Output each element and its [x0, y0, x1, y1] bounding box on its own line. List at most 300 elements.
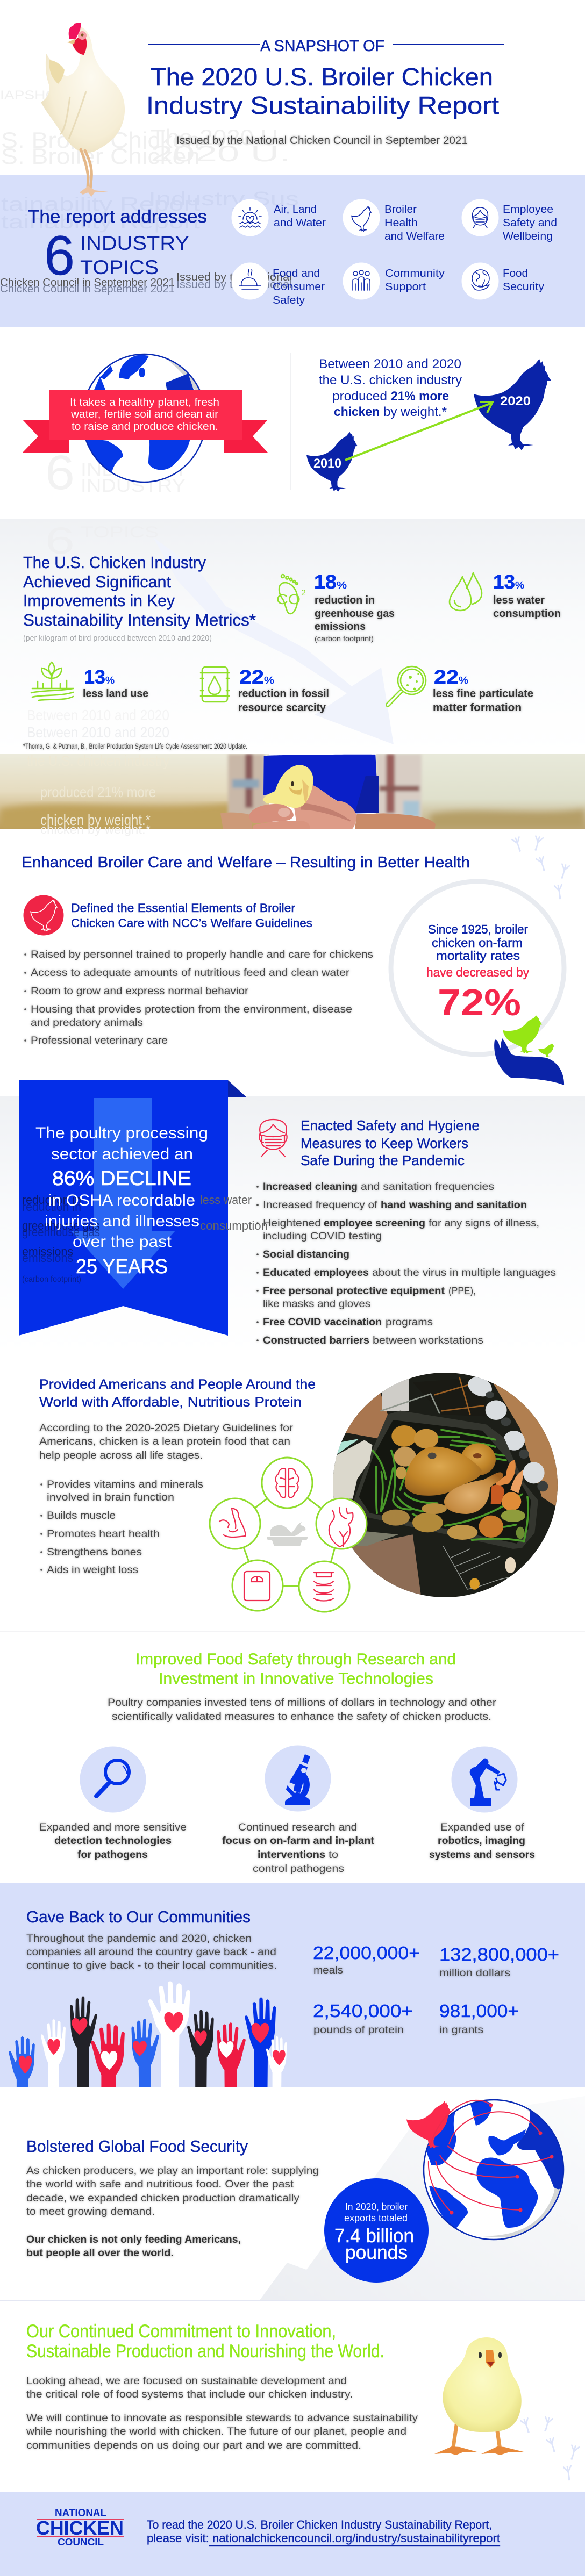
stat: meals: 22,000,000+: [313, 1943, 420, 1963]
community paragraph: Throughout the pandemic and 2020, chicken: [26, 1933, 252, 1944]
ghost text below banner: [45, 446, 188, 500]
ghost text on ribbon: greenhouse gas: [22, 1225, 100, 1239]
mortality callout: Since 1925, broiler: [428, 922, 528, 936]
ghost text below banner: INDUSTRY: [81, 460, 188, 480]
potatoes: [391, 1425, 417, 1447]
mortality callout: 72%: [438, 981, 521, 1023]
ribbon body: [19, 1080, 228, 1336]
commitment paragraph two: while nourishing the world with chicken. The future of our planet, people and: [26, 2426, 406, 2437]
icon: CO2 footprint: [279, 575, 298, 614]
faint ghost title text: The 2020 U.: [151, 125, 285, 150]
protein bullet list: Promotes heart health: [47, 1528, 160, 1540]
topic: food security: [461, 262, 544, 300]
icon: roast on plate: [239, 269, 261, 289]
metric: water: 13: [493, 571, 515, 593]
metrics heading: Achieved Significant: [23, 572, 171, 591]
technology: robotics: systems and sensors: [429, 1849, 535, 1861]
mortality callout: have decreased by: [426, 965, 529, 979]
roast chicken body: [461, 1443, 496, 1475]
welfare bullet list: Access to adequate amounts of nutritious feed and clean water: [31, 967, 350, 979]
broccoli: [501, 1510, 525, 1522]
oven mitt: [332, 1440, 373, 1499]
photo: roast chicken in pan: [332, 1370, 563, 1601]
welfare bullet list: Raised by personnel trained to properly handle and care for chickens: [31, 949, 373, 960]
metric: land use: 13: [84, 666, 105, 688]
topic: broiler health and welfare: and Welfare: [384, 231, 445, 242]
stat: million dollars: million dollars: [439, 1967, 510, 1979]
footnote: *Thoma, G. & Putman, B., Broiler Production System Life Cycle Assessment: 2020 Update.: [23, 742, 247, 750]
subtitle: Issued by the National Chicken Council in September 2021: [176, 134, 468, 147]
safety bullet list: about the virus in multiple languages: [372, 1267, 556, 1279]
topic: broiler health and welfare: Health: [384, 217, 418, 229]
stat: grants: [439, 2001, 519, 2036]
topic: food security: Security: [503, 281, 544, 293]
blue ribbon with decline statistic: [19, 1080, 268, 1336]
food safety paragraph: scientifically validated measures to enhance the safety of chicken products.: [112, 1711, 491, 1723]
welfare bullet list: and predatory animals: [31, 1017, 143, 1029]
technology: detection: detection technologies: [54, 1835, 172, 1847]
community paragraph: continue to give back - to their local communities.: [26, 1960, 277, 1971]
protein bullet list: Builds muscle: [47, 1510, 116, 1522]
safety bullet list: Increased cleaning: [263, 1181, 358, 1193]
photo: yellow chick: [434, 2337, 524, 2455]
ghost text over photo: produced 21% more: [40, 784, 156, 800]
topic: employee safety and wellbeing: Safety and: [503, 217, 557, 229]
banner text: [70, 397, 219, 433]
metrics heading: The U.S. Chicken Industry: [23, 553, 206, 572]
ghost text below banner: 6: [45, 446, 75, 500]
nutrition icon ring: [210, 1458, 367, 1612]
production statement: Between 2010 and 2020: [319, 357, 461, 371]
metric: greenhouse gas: greenhouse gas: [315, 608, 395, 620]
icon: oil barrel: [201, 667, 229, 702]
safety bullet list: Increased frequency of: [263, 1199, 378, 1211]
hen comb: [69, 23, 81, 39]
technology: research: [222, 1746, 375, 1875]
safety bullet list: [256, 1181, 556, 1346]
bird tracks decoration: [512, 836, 569, 899]
footer call to action: To read the 2020 U.S. Broiler Chicken Industry Sustainability Report,: [147, 2518, 492, 2531]
icon: magnifier with particles: [386, 666, 426, 706]
topic: food and consumer safety: Consumer: [273, 281, 325, 293]
logo: National Chicken Council: COUNCIL: [58, 2537, 104, 2548]
photo strip: chick held in hands: [0, 754, 585, 829]
safety heading: [301, 1117, 480, 1168]
metrics note: (per kilogram of bird produced between 2010 and 2020): [23, 634, 212, 643]
hen legs and foot: [81, 149, 91, 189]
safety bullet list: Educated employees: [263, 1267, 369, 1279]
protein heading: [39, 1377, 316, 1410]
ghost text on ribbon: emissions: [22, 1251, 73, 1265]
commitment paragraph two: We will continue to innovate as responsible stewards to advance sustainability: [26, 2412, 418, 2424]
chick feet: [434, 2446, 477, 2455]
topic: community support: Support: [385, 281, 426, 293]
safety bullet list: and sanitation frequencies: [361, 1181, 494, 1193]
mortality callout: chicken on-farm: [432, 936, 523, 950]
safety bullet list: employee screening: [324, 1217, 425, 1229]
commitment paragraph one: the critical role of food systems that include our chicken industry.: [26, 2388, 353, 2400]
metric: fine particulate: 22: [434, 666, 459, 688]
chick face: [479, 2352, 482, 2358]
technology: research: focus on on-farm and in-plant: [222, 1835, 375, 1847]
topics headline: [28, 206, 207, 287]
icon: rooster outline: [352, 206, 371, 231]
food safety heading: Investment in Innovative Technologies: [159, 1670, 433, 1688]
safety bullet list: between workstations: [373, 1334, 483, 1346]
topics headline: TOPICS: [80, 256, 159, 278]
ghost text: council line: Chicken Council in September 2021: [0, 277, 175, 289]
ghost text: council line: [0, 271, 292, 295]
icon: microscope: [285, 1754, 310, 1805]
topic: community support: Community: [385, 268, 445, 279]
mortality callout: mortality rates: [436, 949, 520, 963]
safety bullet list: Constructed barriers: [263, 1334, 369, 1346]
inner down arrow: [71, 1098, 175, 1289]
protein paragraph: [39, 1422, 294, 1461]
ghost text in metrics: TOPICS: [81, 523, 159, 541]
node: muscle arm: [210, 1498, 260, 1549]
ghost text over topics band: Industry Sus: [148, 188, 299, 210]
technology: research: to: [329, 1849, 338, 1861]
topic: employee safety and wellbeing: Employee: [503, 204, 553, 216]
export routes: [429, 2100, 552, 2213]
ghost text on ribbon: [22, 1193, 268, 1284]
metric: fossil resources: resource scarcity: [238, 702, 326, 714]
icon: sun and waves: [239, 207, 261, 227]
metrics heading: Sustainability Intensity Metrics*: [23, 611, 256, 629]
production statement: the U.S. chicken industry: [319, 373, 462, 388]
ghost text: council line: Chicken Council in September 2021: [0, 283, 175, 295]
welfare bullet list: Housing that provides protection from the environment, disease: [31, 1003, 352, 1015]
ghost text over topics band: [1, 188, 299, 233]
food safety paragraph: Poultry companies invested tens of millions of dollars in technology and other: [108, 1697, 497, 1709]
technology: detection: Expanded and more sensitive: [39, 1821, 187, 1833]
technology: research: Continued research and: [238, 1821, 357, 1833]
blue shirt: [263, 755, 379, 813]
technology: robotics: Expanded use of: [440, 1821, 525, 1833]
safety bullet list: like masks and gloves: [263, 1298, 370, 1310]
production statement: [319, 357, 462, 419]
pan: [354, 1411, 538, 1549]
faint section line: [0, 1631, 585, 1632]
metric: greenhouse gas: CO: [276, 591, 301, 607]
community paragraph: companies all around the country gave back - and: [26, 1946, 276, 1958]
welfare subheading: Chicken Care with NCC’s Welfare Guidelines: [71, 916, 312, 930]
commitment paragraph two: [26, 2412, 418, 2451]
safety bullet list: Free COVID vaccination: [263, 1316, 382, 1328]
ribbon text: The poultry processing: [35, 1124, 208, 1142]
ghost text on ribbon: reduction in: [22, 1200, 81, 1214]
metric: fossil resources: reduction in fossil: [238, 688, 329, 700]
growth arrow: [345, 402, 493, 460]
metrics heading: [23, 553, 256, 629]
ghost text over photo: [27, 752, 169, 836]
metric: greenhouse gas: (carbon footprint): [315, 634, 374, 643]
welfare bullet list: Room to grow and express normal behavior: [31, 985, 249, 997]
green beans: [373, 1430, 528, 1542]
main title: Industry Sustainability Report: [146, 91, 499, 119]
food security bold statement: but people all over the world.: [26, 2247, 174, 2259]
photo: white hen: [41, 23, 125, 197]
ribbon text: over the past: [73, 1233, 172, 1251]
oven rack: [443, 1546, 509, 1589]
metric: water: consumption: [493, 608, 561, 620]
commitment heading: Sustainable Production and Nourishing the World.: [26, 2341, 384, 2362]
food security paragraph: [26, 2165, 319, 2218]
banner text: It takes a healthy planet, fresh: [70, 397, 219, 408]
protein paragraph: help people across all life stages.: [39, 1450, 203, 1461]
banner text: to raise and produce chicken.: [72, 421, 218, 433]
metric: fossil resources: %: [264, 675, 274, 686]
metric: land use: %: [105, 675, 115, 686]
background mountain arrow: [259, 2096, 585, 2301]
icon: masked face: [473, 207, 488, 228]
safety bullet list: hand washing and sanitation: [381, 1199, 527, 1211]
logo: National Chicken Council: NATIONAL: [55, 2507, 106, 2519]
band: community: [0, 1883, 585, 2087]
footer call to action: please visit: nationalchickencouncil.org/industry/sustainabilityreport: [147, 2531, 500, 2545]
safety bullet list: programs: [386, 1316, 433, 1328]
safety bullet list: (PPE),: [448, 1285, 476, 1297]
production statement: 21% more: [391, 389, 449, 404]
large faint down arrow: [153, 537, 394, 744]
food safety heading: [135, 1651, 456, 1688]
chart: chicken 2010 to 2020 growth: [306, 359, 551, 492]
section: safety and hygiene background: [0, 1096, 585, 1354]
node: heart organ: [316, 1498, 367, 1549]
metric: greenhouse gas: emissions: [315, 621, 366, 633]
red rooster badge: [24, 895, 63, 935]
ghost text over photo: the U.S. chicken industry: [27, 752, 169, 769]
icon: magnifying glass: [96, 1760, 129, 1796]
icon: face mask: [259, 1120, 287, 1157]
illustration: export globe with routes: [406, 2099, 567, 2241]
chicken silhouette 2020: [474, 359, 551, 450]
protein paragraph: According to the 2020-2025 Dietary Guidelines for: [39, 1422, 294, 1434]
metric: water: %: [515, 580, 524, 591]
safety bullet list: Heightened: [263, 1217, 321, 1229]
ghost text on ribbon: emissions: [22, 1245, 73, 1258]
welfare bullet list: [24, 949, 373, 1046]
welfare subheading: [71, 901, 312, 930]
globe: [87, 355, 199, 482]
globe: [422, 2099, 567, 2241]
bird tracks near chick: [520, 2417, 579, 2480]
chick body: [443, 2337, 522, 2432]
label 2010: 2010: [313, 456, 341, 471]
ghost text over topics band: tainability Report: [1, 193, 200, 215]
ghost text on ribbon: consumption: [200, 1219, 268, 1232]
chick: [262, 765, 313, 808]
safety heading: Safe During the Pandemic: [301, 1152, 465, 1168]
stat: meals: meals: [313, 1964, 343, 1976]
technology: detection: for pathogens: [77, 1849, 148, 1861]
food security bold statement: [26, 2234, 241, 2259]
ghost text in metrics: Between 2010 and 2020: [27, 724, 169, 741]
technology: robotics: robotics, imaging: [438, 1835, 525, 1847]
icon: hen and chick in hand: [494, 1015, 564, 1085]
protein heading: World with Affordable, Nutritious Protein: [39, 1395, 302, 1410]
metric: fine particulate: matter formation: [433, 702, 522, 714]
faint ghost title text: S. Broiler Chicken: [1, 143, 200, 169]
ring connectors: [235, 1483, 341, 1587]
exports callout: In 2020, broiler: [345, 2201, 408, 2212]
node: weight scale: [232, 1560, 283, 1611]
protein heading: Provided Americans and People Around the: [39, 1377, 316, 1392]
food security heading: Bolstered Global Food Security: [26, 2137, 248, 2156]
background wood and light: [346, 1393, 388, 1438]
community paragraph: [26, 1933, 277, 1971]
section: sustainability metrics background: [0, 519, 585, 754]
main title: The 2020 U.S. Broiler Chicken: [151, 63, 493, 91]
ghost text: council line: Issued by the National: [176, 271, 292, 283]
stat: meals: [313, 1943, 420, 1976]
ribbon fold: [228, 1080, 247, 1097]
technology: robotics: [429, 1747, 535, 1861]
ribbon text: 25 YEARS: [76, 1255, 168, 1278]
logo: National Chicken Council: CHICKEN: [36, 2517, 124, 2539]
banner tails: [23, 420, 69, 453]
topic: community support: [343, 262, 445, 300]
safety bullet list: for any signs of illness,: [429, 1217, 539, 1229]
chicken silhouette 2010: [306, 432, 358, 492]
ghost text over photo: chicken by weight.*: [40, 823, 151, 836]
safety bullet list: including COVID testing: [263, 1230, 382, 1242]
protein bullet list: Provides vitamins and minerals: [47, 1479, 203, 1490]
topic: food and consumer safety: [231, 262, 325, 306]
metric: fossil resources: [201, 666, 329, 714]
exports callout: [324, 2178, 429, 2283]
welfare subheading: Defined the Essential Elements of Broiler: [71, 901, 295, 915]
community heading: Gave Back to Our Communities: [26, 1907, 251, 1926]
metrics heading: Improvements in Key: [23, 591, 175, 610]
safety bullet list: Free personal protective equipment: [263, 1285, 445, 1297]
topic: food security: Food: [503, 268, 528, 279]
stat: pounds of protein: [313, 2001, 413, 2036]
ghost text below banner: INDUSTRY: [81, 476, 186, 496]
ribbon text: [35, 1124, 208, 1278]
ghost text in metrics: [27, 520, 169, 741]
exports callout: exports totaled: [344, 2213, 408, 2223]
stat: grants: 981,000+: [439, 2001, 519, 2021]
stat: million dollars: [439, 1944, 559, 1979]
illustration: raised hands with hearts: [9, 1981, 287, 2087]
icon: globe in hand: [472, 270, 489, 290]
topics headline: The report addresses: [28, 206, 207, 226]
topics headline: INDUSTRY: [80, 232, 189, 254]
roast thigh: [444, 1472, 503, 1514]
stat: grants: in grants: [439, 2024, 483, 2036]
ghost text on ribbon: greenhouse gas: [22, 1219, 100, 1232]
ghost text on ribbon: less water: [200, 1193, 252, 1207]
faint ghost title text: IAPSHOT OF: [0, 88, 91, 103]
icon: three people: [353, 270, 370, 290]
forearms: [355, 813, 436, 829]
ribbon text: sector achieved an: [51, 1145, 193, 1163]
commitment heading: Our Continued Commitment to Innovation,: [26, 2321, 336, 2342]
commitment paragraph two: communities depends on us doing our part and we are committed.: [26, 2439, 361, 2451]
ribbon text: 86% DECLINE: [52, 1167, 191, 1190]
topic: food and consumer safety: Safety: [273, 295, 305, 306]
food safety heading: Improved Food Safety through Research and: [135, 1651, 456, 1668]
faint vertical divider: [290, 353, 291, 490]
ghost text in metrics: Between 2010 and 2020: [27, 707, 169, 723]
faint ghost title text: [0, 88, 290, 169]
topics headline: 6: [44, 225, 75, 287]
protein bullet list: involved in brain function: [47, 1491, 174, 1503]
icon: water drops: [450, 573, 482, 611]
faint ghost title text: 2020 U.: [151, 141, 290, 166]
ribbon text: injuries and illnesses: [45, 1212, 199, 1230]
safety heading: Measures to Keep Workers: [301, 1135, 468, 1151]
main title: [146, 63, 499, 119]
front hand: [249, 804, 294, 823]
icon: roast turkey: [267, 1522, 308, 1546]
food security bold statement: Our chicken is not only feeding Americans,: [26, 2234, 241, 2245]
topic: broiler health and welfare: Broiler: [384, 204, 417, 216]
section rule: [0, 2300, 585, 2301]
topic: air, land and water: [231, 199, 326, 236]
node: brain: [262, 1458, 312, 1508]
heading kicker: a snapshot of: [148, 38, 504, 55]
safety heading: Enacted Safety and Hygiene: [301, 1117, 480, 1133]
topic: broiler health and welfare: [343, 199, 445, 242]
food security paragraph: As chicken producers, we play an important role: supplying: [26, 2165, 319, 2177]
community statistics: [313, 1943, 559, 2036]
label 2020: 2020: [500, 394, 531, 408]
metric: fine particulate: %: [459, 675, 468, 686]
ghost text in metrics: 6: [45, 520, 75, 562]
metric: fine particulate: [386, 666, 533, 714]
technology: research: interventions: [258, 1849, 325, 1861]
chick legs: [453, 2421, 500, 2451]
metric: water: [450, 571, 561, 620]
protein bullet list: [40, 1479, 203, 1576]
topic: air, land and water: and Water: [274, 217, 326, 229]
blurred plaid sleeves: [228, 754, 422, 821]
banner body: [49, 390, 242, 440]
metric: fine particulate: less fine particulate: [433, 688, 533, 700]
food safety paragraph: [108, 1697, 497, 1723]
production statement: by weight.*: [383, 405, 447, 419]
node: spine bones: [299, 1561, 349, 1612]
ribbon text: in OSHA recordable: [48, 1192, 195, 1209]
banner text: water, fertile soil and clean air: [70, 408, 218, 420]
topic: food and consumer safety: Food and: [273, 268, 320, 279]
metric: greenhouse gas: [276, 571, 395, 643]
topic: employee safety and wellbeing: Wellbeing: [503, 231, 553, 242]
metric: greenhouse gas: 18: [314, 571, 337, 593]
red hen: [406, 2101, 452, 2149]
commitment paragraph one: Looking ahead, we are focused on sustainable development and: [26, 2375, 347, 2387]
food security paragraph: decade, we expanded chicken production dramatically: [26, 2192, 299, 2204]
stat: pounds of protein: 2,540,000+: [313, 2001, 413, 2021]
metric: land use: [31, 662, 148, 700]
faint ghost title text: S. Broiler Chicken: [1, 127, 200, 153]
commitment paragraph one: [26, 2375, 353, 2400]
production statement: produced: [332, 389, 387, 404]
metric: land use: less land use: [83, 688, 148, 700]
footer call to action: [147, 2518, 500, 2546]
footer band: [0, 2492, 585, 2576]
metric: greenhouse gas: reduction in: [315, 594, 375, 606]
stat: pounds of protein: pounds of protein: [313, 2024, 404, 2036]
safety bullet list: Social distancing: [263, 1248, 349, 1260]
heading kicker: a snapshot of: A SNAPSHOT OF: [260, 38, 384, 55]
fingers: [294, 785, 356, 829]
illustration: globe with banner: [23, 352, 268, 484]
technology: research: control pathogens: [253, 1863, 344, 1875]
